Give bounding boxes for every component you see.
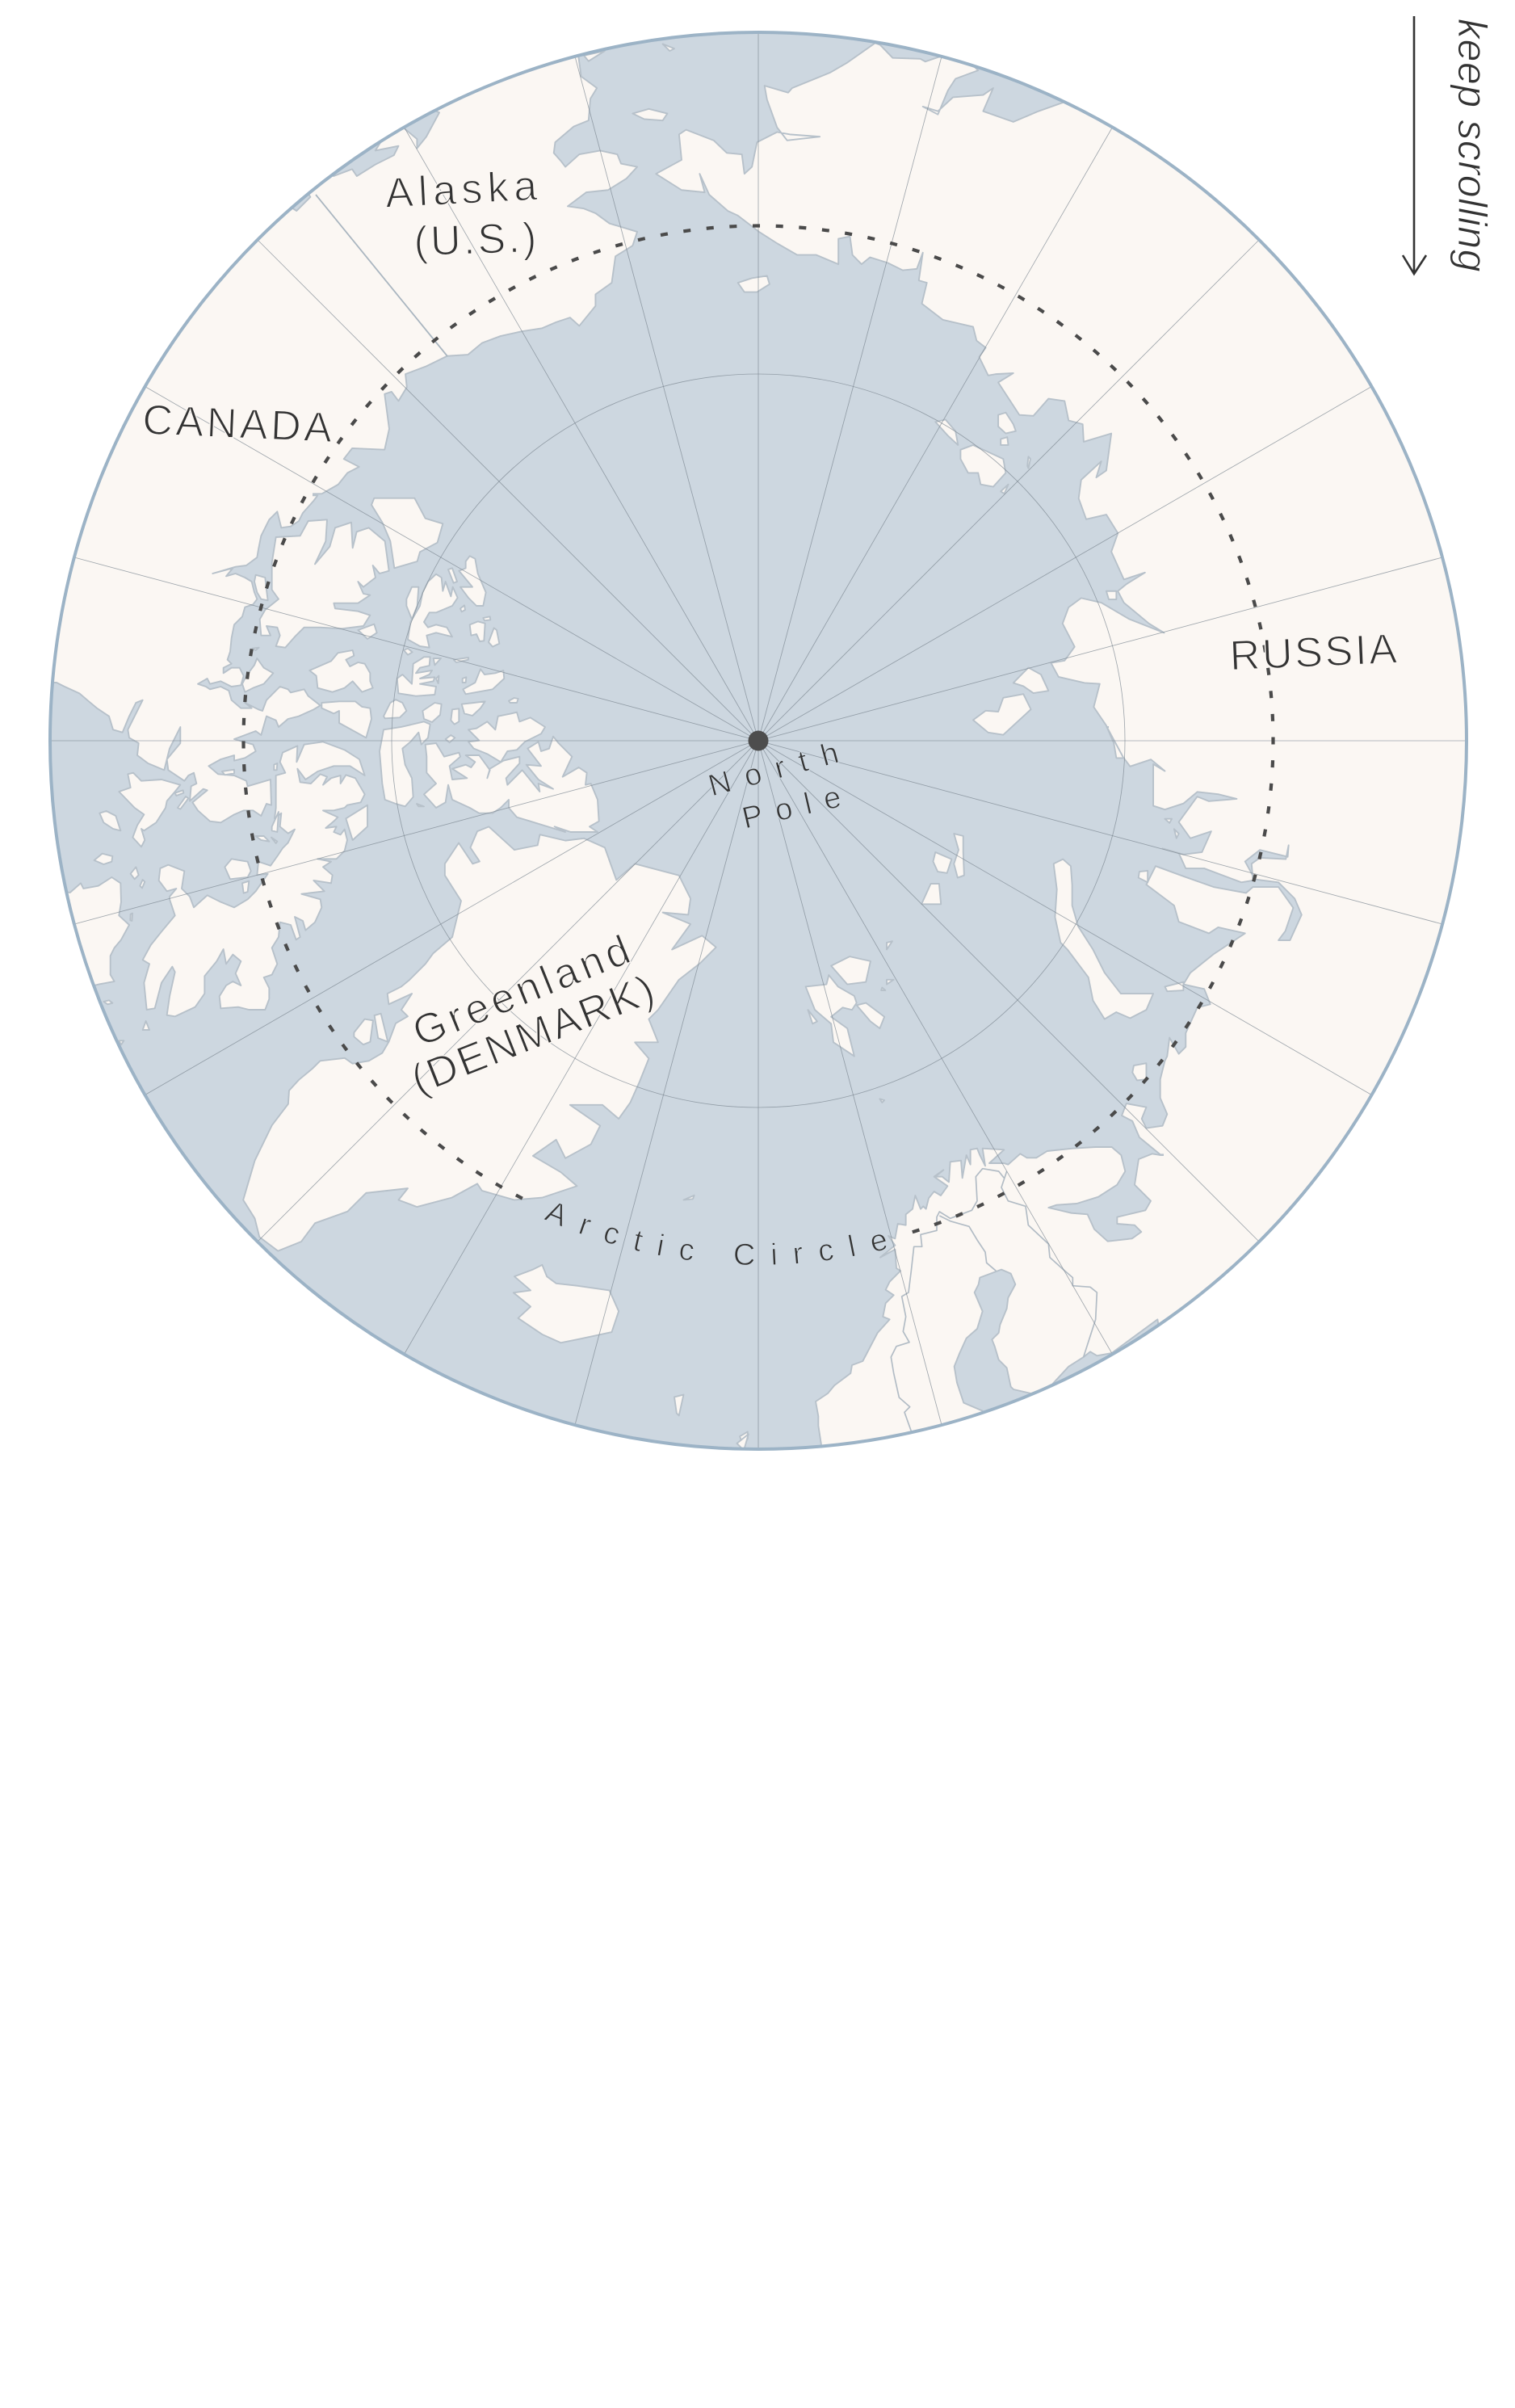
label: (U.S.): (U.S.) [413, 214, 539, 266]
land: Canada mainland west [43, 495, 321, 822]
land: western Canada and islands [43, 495, 443, 822]
label: (DENMARK): (DENMARK) [405, 965, 663, 1103]
label: Pole: Pole [739, 777, 857, 836]
North Pole dot [748, 730, 769, 751]
land: Russia north-east quadrant [655, 44, 1465, 759]
land: small Bering islands [584, 44, 674, 120]
land: northern cape island [468, 712, 545, 762]
map disc outline [50, 32, 1467, 1449]
land: Franz Josef Land and small islands [740, 819, 1183, 1446]
land: small and mid-size channel islands [222, 575, 377, 775]
land: Melville-type island [408, 574, 458, 648]
water: Bothnia outline [953, 1268, 1159, 1412]
land: Hudson Strait islands [94, 763, 367, 1044]
label: Greenland: Greenland [406, 925, 640, 1056]
land: Disko Island [354, 1014, 388, 1044]
patch hiding the seam in Canada [95, 493, 313, 496]
water: bay shapes [292, 111, 440, 212]
patch hiding the seam in Russia north [1109, 726, 1465, 728]
land: central Russia and Barents islands [740, 727, 1515, 1446]
land: Ellesmere Island [424, 737, 599, 832]
land: Greenland [243, 826, 716, 1251]
meridians and latitude circle graticule [50, 32, 1467, 1449]
label: Alaska: Alaska [384, 162, 543, 217]
Alaska-Canada border [316, 195, 447, 356]
arrow head [1403, 255, 1426, 274]
land: lobed island [260, 519, 389, 648]
land: East Siberian and Laptev islands [738, 275, 1116, 735]
land: Faroe and Shetland specks [674, 1196, 749, 1450]
land: Novaya Zemlya [1054, 859, 1153, 1019]
Arctic Circle dashed line [243, 226, 1273, 1234]
label: CANADA: CANADA [141, 397, 336, 452]
arctic polar map infographic [48, 16, 1488, 1451]
patch hiding the seam in Russia south [1164, 1149, 1487, 1161]
dashes: 3 o'clock over the top to bottom left [243, 226, 1273, 1202]
latitude circle [392, 374, 1125, 1107]
land: Baffin Island [143, 742, 365, 1016]
water: north-west bays [292, 111, 440, 212]
land: Scandinavia and Kola [815, 1146, 1326, 1444]
label: North: North [705, 733, 856, 804]
land: Queen Elizabeth Islands [380, 556, 599, 832]
land: Svalbard [806, 956, 894, 1057]
land: Amund-type island [463, 669, 504, 694]
land: Bathurst-type island [397, 657, 436, 696]
land: Labrador peninsula [68, 876, 130, 985]
label: keep scrolling: keep scrolling [1450, 19, 1495, 272]
label: RUSSIA: RUSSIA [1228, 625, 1400, 680]
keep scrolling arrow [1403, 16, 1426, 274]
land: Banks-type island [371, 498, 443, 568]
arrow shaft [1413, 16, 1415, 273]
land: Alaska and northern Canada [97, 44, 675, 494]
dashes: 3 o'clock to bottom right [904, 741, 1273, 1234]
land: Axel Heiberg [380, 721, 430, 806]
border lines [891, 1169, 1097, 1431]
national borders in Scandinavia and Russia [891, 1169, 1097, 1431]
water: Gulf of Bothnia and Baltic Sea [953, 1268, 1159, 1412]
land: Russia mainland Kara coast [1107, 726, 1465, 1154]
meridian lines every 15 degrees [50, 32, 1467, 1449]
land: Greenland and Iceland [243, 826, 749, 1450]
land: Baffin Island area [43, 742, 367, 1044]
label: Arctic Circle: Arctic Circle [544, 1204, 887, 1265]
land masses clipped to the disc [14, 0, 1515, 1481]
land: northern archipelago small islands [384, 556, 518, 806]
land: Scandinavia, Kola and north-west Russia [815, 1146, 1326, 1444]
land: Iceland [514, 1265, 619, 1343]
map disc: ocean [50, 32, 1467, 1449]
land: Alaska and Canada north coast [97, 57, 638, 494]
land: Russia mainland north [655, 44, 1465, 759]
